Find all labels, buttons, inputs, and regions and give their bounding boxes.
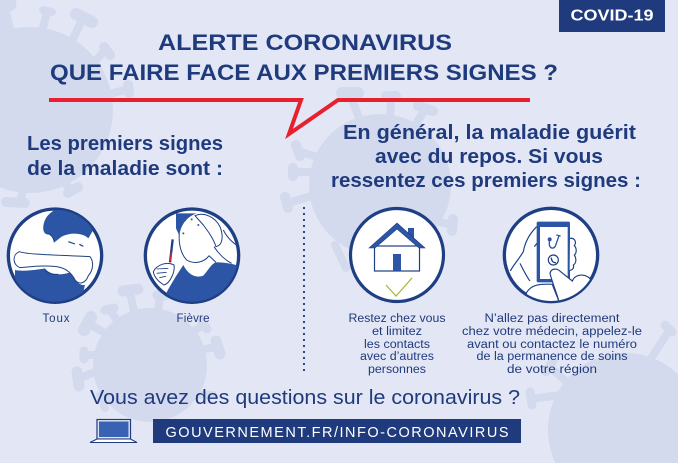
heading: first signs: de la maladie sont :: [27, 157, 223, 180]
text block: call doctor: N’allez pas directement: [484, 313, 620, 325]
label: Toux: Toux: [42, 313, 70, 325]
text block: call doctor: [462, 313, 642, 376]
icon: fever: [145, 209, 240, 305]
text block: stay home: [348, 313, 446, 376]
heading: first signs: [27, 132, 223, 180]
text block: call doctor: de la permanence de soins: [476, 351, 628, 363]
virus background: bottom left: [77, 289, 220, 422]
heading: general advice: avec du repos. Si vous: [375, 145, 603, 168]
text block: call doctor: de votre région: [507, 364, 597, 376]
label: Fièvre: Fièvre: [176, 313, 210, 325]
title: [50, 30, 558, 85]
red speech bubble line: [49, 100, 530, 134]
title: QUE FAIRE FACE AUX PREMIERS SIGNES ?: [50, 60, 558, 85]
website banner: GOUVERNEMENT.FR/INFO-CORONAVIRUS: [166, 425, 508, 441]
text block: call doctor: chez votre médecin, appelez-le: [462, 326, 642, 338]
icon: house: [350, 208, 444, 302]
icon: laptop: [90, 420, 137, 442]
icon: cough: [8, 209, 102, 305]
text block: call doctor: avant ou contactez le numéro: [467, 339, 637, 351]
heading: general advice: [331, 121, 641, 192]
COVID-19 badge: COVID-19: [570, 8, 654, 24]
text block: stay home: et limitez: [372, 326, 422, 338]
dotted divider: [303, 208, 305, 375]
virus background: centre: [285, 93, 453, 268]
heading: general advice: ressentez ces premiers signes :: [331, 169, 641, 192]
text block: stay home: personnes: [368, 364, 426, 376]
heading: general advice: En général, la maladie guérit: [343, 121, 636, 144]
icon: phone: [504, 208, 598, 305]
virus background: bottom right: [530, 325, 678, 463]
heading: first signs: Les premiers signes: [27, 132, 223, 155]
website banner: [153, 419, 521, 443]
text block: stay home: avec d’autres: [360, 351, 434, 363]
virus background: top left: [0, 0, 129, 203]
text block: stay home: Restez chez vous: [348, 313, 446, 325]
title: ALERTE CORONAVIRUS: [158, 30, 452, 55]
text block: stay home: les contacts: [364, 339, 430, 351]
question line: Vous avez des questions sur le coronavirus ?: [90, 387, 520, 409]
COVID-19 badge: [559, 0, 665, 32]
